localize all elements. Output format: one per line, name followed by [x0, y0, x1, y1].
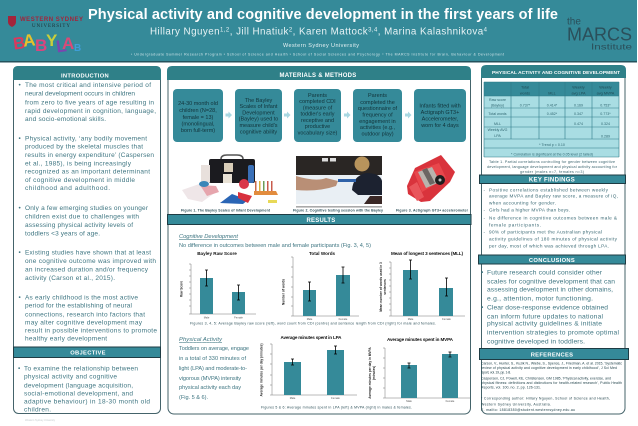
authors: 1,2 — [220, 28, 230, 34]
logo: Western Sydney University: WESTERN SYDNEY — [20, 17, 83, 23]
introduction text: et al., 1985), is being increasingly — [25, 161, 132, 168]
figure 3 caption: Figure 3. Actigraph GT3+ accelerometer — [396, 208, 469, 212]
step 5: Actigraph GT3+ — [421, 110, 459, 116]
key findings text: when accounting for gender. — [489, 200, 556, 206]
logo: Babylab — [12, 30, 81, 56]
key findings text: No difference in cognitive outcomes between male & — [489, 216, 618, 220]
table caption: Table 1. Partial correlations controlling for gender between cognitive — [489, 160, 615, 164]
image: cognitive testing session — [296, 156, 382, 207]
conclusions heading — [478, 255, 626, 264]
cognitive development text: No difference in outcomes between male and female participants (Fig. 3, 4, 5) — [179, 243, 371, 249]
panel heading: PHYSICAL ACTIVITY AND COGNITIVE DEVELOPMENT — [492, 70, 620, 76]
physical activity text: Toddlers on average, engage — [179, 346, 249, 352]
introduction text: childhood and adulthood. — [25, 185, 110, 192]
introduction text: neural development occurs in children — [25, 91, 135, 98]
affiliation: Western Sydney University — [283, 43, 359, 49]
key findings text: Girls had a higher MVPA than boys. — [489, 208, 570, 212]
references text: review of physical activity and cognitive development in early childhood’, J Sci Med — [481, 366, 617, 370]
step 3: productive — [305, 124, 330, 130]
correlation table: Weekly — [572, 86, 585, 90]
chart: LPA minutes — [260, 335, 357, 400]
references text: Caspersen, CJ, Powell, KE, Christensen, GM 1985, ‘Physical activity, exercise, and — [481, 376, 611, 380]
step 2: Scales of Infant — [240, 104, 278, 110]
introduction text: one cognitive outcome was improved with — [25, 258, 156, 265]
step 2 — [235, 89, 282, 142]
chart: LPA minutes: Average minutes per day (minutes) — [260, 343, 264, 397]
correlation table: 0.773* — [600, 112, 611, 116]
conclusions text: e.g., attention, motor functioning. — [487, 295, 593, 302]
chart: LPA minutes: Average minutes spent in LPA — [280, 335, 342, 340]
chart: mean of longest 3 sentences: Mean number of words used in 3 — [379, 262, 383, 312]
logo: Babylab: A — [22, 30, 36, 51]
chart: mean of longest 3 sentences: Female — [442, 317, 451, 321]
logo: Western Sydney University — [8, 16, 83, 29]
introduction text: connections, research into factors that — [25, 311, 145, 318]
panel: introduction — [13, 66, 161, 414]
chart: mean of longest 3 sentences: sentences — [383, 279, 387, 295]
conclusions text: intervention strategies to promote optimal — [487, 329, 620, 336]
step 4: activities (e.g., — [360, 125, 396, 131]
step 5: Accelerometer, — [422, 116, 459, 122]
key findings text: average MVPA and Bayley raw score, a measure of IQ, — [489, 194, 618, 198]
conclusions text: Future research could consider other — [487, 269, 603, 276]
authors: 2 — [289, 28, 293, 34]
materials heading — [167, 66, 471, 80]
chart: Bayley raw score: Raw Score — [180, 281, 184, 297]
step 1 — [173, 89, 223, 142]
footnote: Western Sydney University — [25, 418, 56, 422]
introduction text: and socio-emotional skills. — [25, 116, 106, 123]
correlation table: 0.753* — [600, 104, 611, 108]
panel heading — [481, 65, 626, 78]
step 3: Parents — [308, 93, 327, 99]
arrow — [226, 112, 232, 118]
arrow — [344, 112, 350, 118]
chart: MVPA minutes: (minutes) — [372, 366, 376, 380]
correlation table: 0.347 — [574, 112, 583, 116]
step 2: (Bayley) used to — [239, 116, 278, 122]
introduction text: activity (Carson et al., 2015). — [25, 275, 115, 282]
arrow — [405, 112, 412, 118]
step 4: Parents — [368, 93, 387, 99]
physical activity heading: Physical Activity — [179, 337, 223, 343]
introduction text: children exist due to challenges with — [25, 214, 139, 221]
chart: mean of longest 3 sentences: Male — [408, 317, 414, 321]
conclusions text: can inform future updates to national — [487, 313, 604, 320]
correlation table: avg MVPA — [597, 92, 615, 96]
figure 2 caption: Figure 2. Cognitive testing session with the Bayley — [293, 208, 383, 212]
objective text: physical activity and cognitive — [24, 374, 117, 381]
references text: * Corresponding author: Hillary Nguyen, School of Science and Health, — [481, 396, 610, 400]
conclusions text: • — [481, 269, 484, 276]
step 2: cognitive ability — [240, 130, 277, 136]
chart: MVPA minutes — [368, 337, 470, 403]
step 3: vocabulary size) — [298, 130, 338, 136]
step 3: (measure of — [303, 106, 333, 112]
materials heading: MATERIALS & METHODS — [280, 73, 356, 79]
introduction text: • — [18, 205, 22, 212]
logo: Babylab: B — [35, 36, 47, 55]
introduction text: period for the establishing of neural — [25, 303, 133, 310]
key findings text: - — [484, 216, 486, 220]
logo: MARCS Institute: Institute — [591, 42, 632, 52]
authors: , Jill Hnatiuk — [230, 26, 289, 38]
conclusions text: physical activity guidelines & initiate — [487, 320, 602, 327]
logo: Babylab: B — [12, 33, 27, 54]
introduction text: Physical activity, ‘any bodily movement — [25, 135, 147, 142]
physical activity text: physical activity each day — [179, 385, 241, 391]
step 4 — [353, 89, 402, 142]
cognitive development heading: Cognitive Development — [179, 234, 238, 240]
authors: , Marina Kalashnikova — [378, 26, 484, 38]
chart: total words — [282, 251, 359, 321]
step 1: (monolingual, — [181, 122, 215, 128]
conclusions text: scales for cognitive development that can — [487, 278, 615, 285]
image: Bayley kit — [182, 155, 278, 204]
logo: Babylab: A — [62, 34, 74, 53]
header banner — [0, 0, 637, 62]
affiliation footnotes: ¹ Undergraduate Summer Research Program ² School of Science and Health ³ School of Social Sciences and Psychology ⁴ The MARCS Institute for Brain, Behaviour & Development — [131, 52, 504, 56]
introduction text: produced by the skeletal muscles that — [25, 144, 143, 151]
authors: 4 — [484, 28, 488, 34]
table caption: development, language development and physical activity accounting for — [487, 165, 618, 169]
references text: Carson, V., Hunter, S., Kuzik N., Wiebe, S., Spence, J., Friedman, A. et al. 2015, ‘Systematic — [481, 362, 622, 366]
physical activity text: vigorous (MVPA) intensity — [179, 376, 241, 382]
key findings text: per day, most of which was achieved through LPA. — [489, 244, 609, 248]
conclusions text: Clear dose-response evidence obtained — [487, 304, 608, 311]
introduction text: Only a few emerging studies on younger — [25, 205, 149, 212]
step 4: engagement in — [359, 119, 396, 125]
chart: total words: Male — [307, 317, 313, 321]
correlation table: 0.452* — [547, 112, 558, 116]
objective text: social-emotional development, and — [24, 391, 133, 398]
physical activity text: light (LPA) and moderate-to- — [179, 366, 247, 372]
references text: Western Sydney University, Australia. — [481, 402, 551, 406]
references heading: REFERENCES — [531, 352, 573, 358]
introduction text: recognized as an important determinant — [25, 169, 150, 176]
objective text — [18, 365, 150, 413]
authors: , Karen Mattock — [293, 26, 368, 38]
step 4: questionnaire of — [358, 106, 398, 112]
step 4: outdoor play) — [361, 132, 394, 138]
panel: physical activity and cognitive development — [478, 65, 628, 414]
key findings text — [484, 188, 618, 248]
step 5: Infants fitted with — [419, 104, 461, 110]
chart: MVPA minutes: Female — [446, 399, 455, 403]
step 3: completed CDI — [299, 99, 336, 105]
results heading: RESULTS — [307, 218, 335, 224]
introduction text: toddlers <3 years of age. — [25, 231, 100, 238]
step 3 — [294, 89, 341, 142]
key findings text: - — [484, 208, 486, 212]
key findings text: - — [484, 230, 486, 234]
logo: Babylab: L — [55, 36, 68, 56]
chart: MVPA minutes: Average minutes spent in MVPA — [387, 337, 454, 342]
image: Actigraph accelerometer — [407, 155, 455, 202]
introduction text: results in energy expenditure’ (Caspersen — [25, 152, 154, 159]
chart: LPA minutes: Male — [290, 396, 296, 400]
conclusions text — [481, 269, 620, 345]
step 3: receptive and — [301, 118, 334, 124]
introduction text: an increased duration and/or frequency — [25, 266, 149, 273]
introduction text: • — [18, 294, 22, 301]
correlation table: * Trend p = 0.10 — [539, 143, 565, 147]
results heading — [168, 214, 471, 224]
correlation table: Total — [521, 86, 529, 90]
step 4: completed the — [360, 100, 395, 106]
panel: materials and methods — [167, 66, 471, 414]
correlation table: Weekly AVG — [488, 128, 508, 132]
introduction text: rapid development in cognition, language, — [25, 108, 156, 115]
authors: 3,4 — [368, 28, 378, 34]
chart: Bayley raw score: Male — [204, 316, 210, 320]
chart: Bayley raw score: Female — [234, 316, 243, 320]
correlation table: 0.474 — [574, 122, 583, 126]
introduction text: • — [18, 250, 22, 257]
step 5: worn for 4 days — [420, 123, 459, 129]
physical activity text: (Fig. 5 & 6). — [179, 395, 208, 401]
logo: Babylab: Y — [46, 31, 58, 50]
key findings heading — [480, 175, 626, 184]
chart: mean of longest 3 sentences: Mean of longest 3 sentences (MLL) — [391, 251, 463, 256]
title: Physical activity and cognitive development in the first years of life — [88, 7, 558, 23]
objective heading — [14, 347, 160, 358]
chart: total words: Number of words — [282, 279, 286, 305]
conclusions text: • — [481, 304, 484, 311]
introduction text: The most critical and intensive period of — [25, 82, 151, 89]
correlation table: 0.414* — [547, 104, 558, 108]
introduction text: As early childhood is the most active — [25, 294, 138, 301]
logo: Western Sydney University: UNIVERSITY — [32, 24, 70, 29]
figures 5 6 caption: Figures 5 & 6: Average minutes spent in LPA (left) & MVPA (right) in males & females. — [261, 406, 412, 410]
physical activity text: in a total of 330 minutes of — [179, 356, 246, 362]
conclusions heading: CONCLUSIONS — [529, 258, 575, 264]
correlation table: 0.737* — [520, 104, 531, 108]
figures 3 4 5 caption: Figures 3, 4, 5: Average Bayley raw score (left), word count from CDI (centre) and sentence length from CDI (right) for male and females. — [190, 322, 436, 326]
key findings text: activity guidelines of 180 minutes of physical activity — [489, 236, 618, 242]
key findings text: female participants. — [489, 222, 541, 228]
introduction text — [18, 82, 157, 343]
key findings text: - — [484, 188, 486, 192]
correlation table: 0.289 — [601, 134, 610, 138]
chart: MVPA minutes: Average minutes per day in MVPA — [368, 347, 372, 399]
introduction heading — [13, 66, 161, 80]
correlation table: 0.169 — [574, 104, 583, 108]
correlation table: MLL — [494, 122, 501, 126]
correlation table: 0.324 — [601, 122, 610, 126]
logo: Babylab: B — [74, 43, 81, 54]
step 5 — [414, 89, 466, 142]
introduction text: result in possible interventions to promote — [25, 328, 157, 335]
step 2: measure child's — [239, 123, 278, 129]
chart: Bayley raw score — [180, 251, 256, 320]
objective text: • — [18, 365, 21, 372]
chart: mean of longest 3 sentences — [379, 251, 465, 321]
step 4: frequency of — [362, 112, 393, 118]
table caption: gender (males n=7, females n=3) — [520, 170, 584, 174]
objective text: development (language acquisition, — [24, 382, 133, 389]
correlation table: words — [520, 92, 530, 96]
physical activity text — [179, 346, 249, 401]
step 1: 24-30 month old — [178, 101, 218, 107]
introduction heading: INTRODUCTION — [61, 74, 109, 80]
references text: E. mailto: 18818380@student.westernsydney.edu.au — [481, 408, 575, 412]
key findings text: 90% of participants met the Australian physical — [489, 230, 602, 234]
step 1: children (N=28, — [179, 108, 217, 114]
step 2: The Bayley — [245, 98, 273, 104]
key findings text: Positive correlations established between weekly — [489, 188, 609, 192]
chart: LPA minutes: Female — [331, 396, 340, 400]
introduction text: assessing physical activity levels of — [25, 222, 133, 229]
correlation table: avg LPA — [571, 92, 586, 96]
introduction text: • — [18, 82, 22, 89]
objective text: adaptive behaviour) in 18-30 month old — [24, 399, 150, 406]
logo: MARCS Institute — [567, 16, 632, 52]
chart: Bayley raw score: Bayley Raw Score — [197, 251, 237, 256]
correlation table: (Bayley) — [491, 104, 504, 108]
step 2: Development — [242, 110, 275, 116]
step 1: born full-term) — [181, 128, 215, 134]
chart: total words: Total Words — [309, 251, 335, 256]
conclusions text: cognitive developed in toddlers. — [487, 338, 585, 345]
introduction text: Existing studies have shown that at least — [25, 250, 151, 257]
step 1: female = 13) — [183, 115, 214, 121]
correlation table — [484, 82, 619, 157]
objective text: To examine the relationship between — [24, 365, 138, 372]
references text: Reports, vol. 100, no. 2, pp. 126-131. — [481, 386, 541, 390]
objective heading: OBJECTIVE — [70, 350, 106, 356]
correlation table: Raw score — [489, 98, 506, 102]
step 3: toddler's early — [300, 112, 335, 118]
chart: total words: Female — [339, 317, 348, 321]
arrow — [284, 112, 290, 118]
key findings heading: KEY FINDINGS — [529, 178, 575, 184]
correlation table: Weekly — [599, 86, 612, 90]
objective text: children. — [24, 406, 51, 413]
introduction text: may alter cognitive development may — [25, 320, 143, 327]
correlation table: * Correlation is significant at the 0.05 level (2 tailed) — [511, 152, 593, 156]
introduction text: • — [18, 135, 22, 142]
references heading — [480, 348, 628, 360]
correlation table: LPA — [494, 134, 501, 138]
references text: physical fitness: definitions and distinctions for health-related research’, Public Health — [481, 381, 622, 385]
introduction text: from zero to five years of age resulting in — [25, 99, 154, 106]
references text — [481, 362, 622, 412]
correlation table: MLL — [548, 92, 556, 96]
logo: MARCS Institute: the — [567, 16, 581, 28]
conclusions text: assessing development in other domains, — [487, 286, 613, 293]
authors: Hillary Nguyen — [150, 26, 220, 38]
logo: MARCS Institute: MARCS — [567, 24, 632, 44]
correlation table: Total words — [488, 112, 507, 116]
introduction text: healthy early development — [25, 336, 107, 343]
chart: MVPA minutes: Male — [406, 399, 412, 403]
introduction text: of cognitive development in middle — [25, 177, 135, 184]
references text: Sport, vol. 19, pp. 1-8. — [481, 370, 511, 374]
figure 1 caption: Figure 1. The Bayley Scales of Infant Development — [181, 208, 271, 212]
